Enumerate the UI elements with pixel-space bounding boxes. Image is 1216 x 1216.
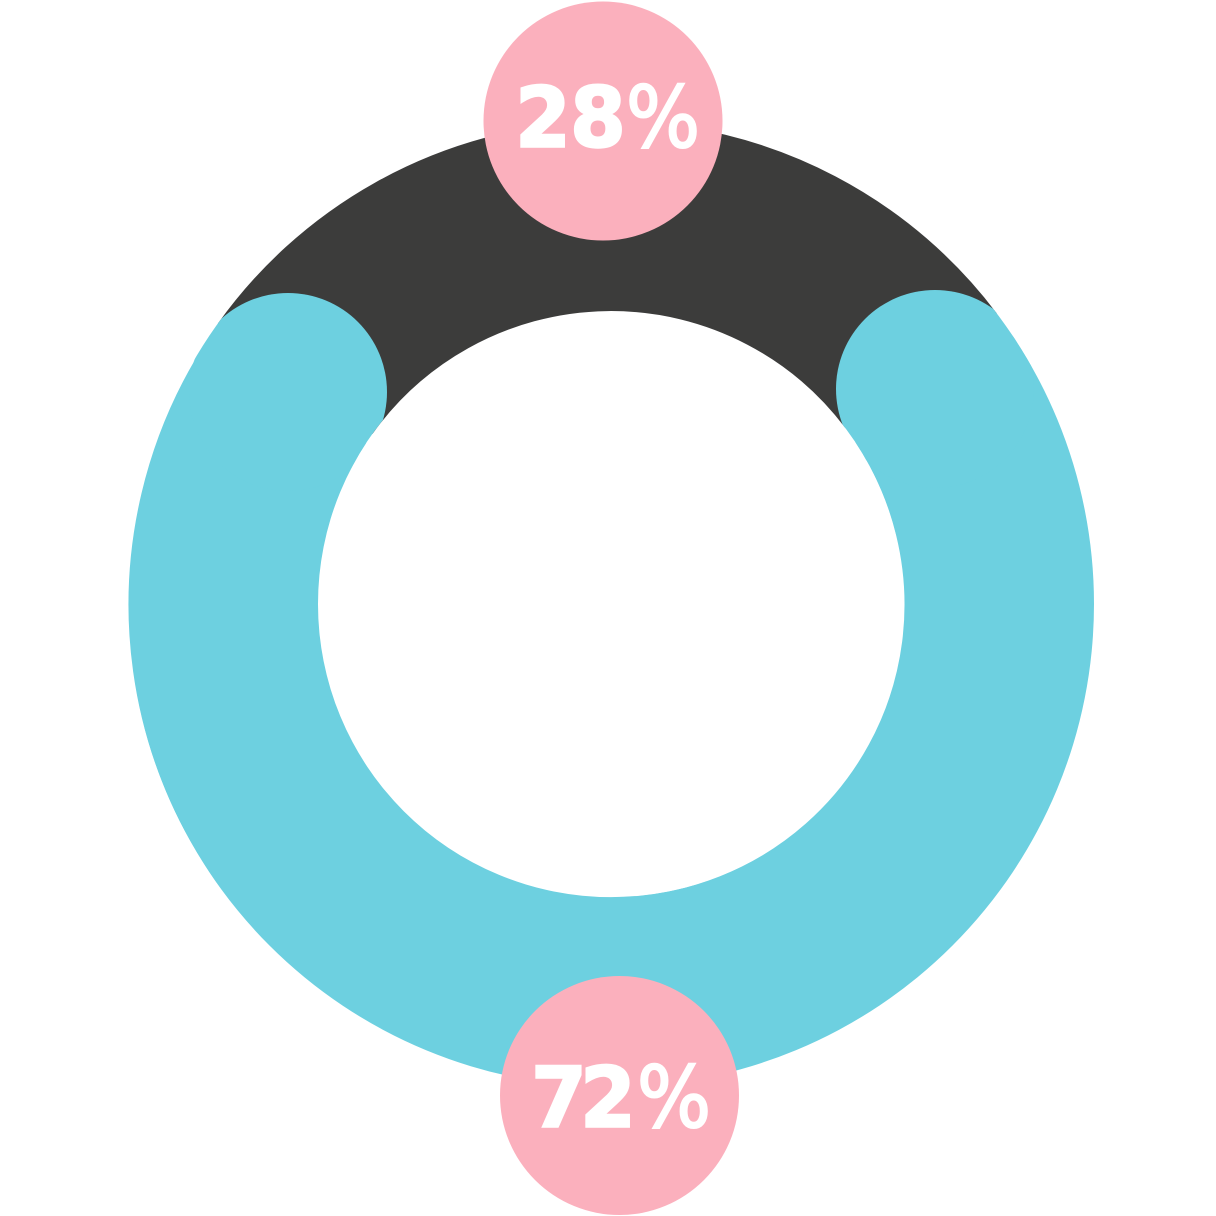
badge: 28% xyxy=(484,2,722,240)
badge: 28%: 8 xyxy=(570,70,626,167)
badge: 72% xyxy=(500,976,739,1215)
badge: 72%: 2 xyxy=(580,1050,636,1147)
badge: 72%: 7 xyxy=(531,1050,587,1147)
ring segment: 28% dark xyxy=(295,216,921,379)
badge: 28%: % xyxy=(626,69,700,168)
badge: 28%: 2 xyxy=(515,70,571,167)
badge: 72%: % xyxy=(637,1049,711,1148)
ring segment: 72% blue xyxy=(189,290,1034,993)
donut chart xyxy=(128,2,1094,1215)
